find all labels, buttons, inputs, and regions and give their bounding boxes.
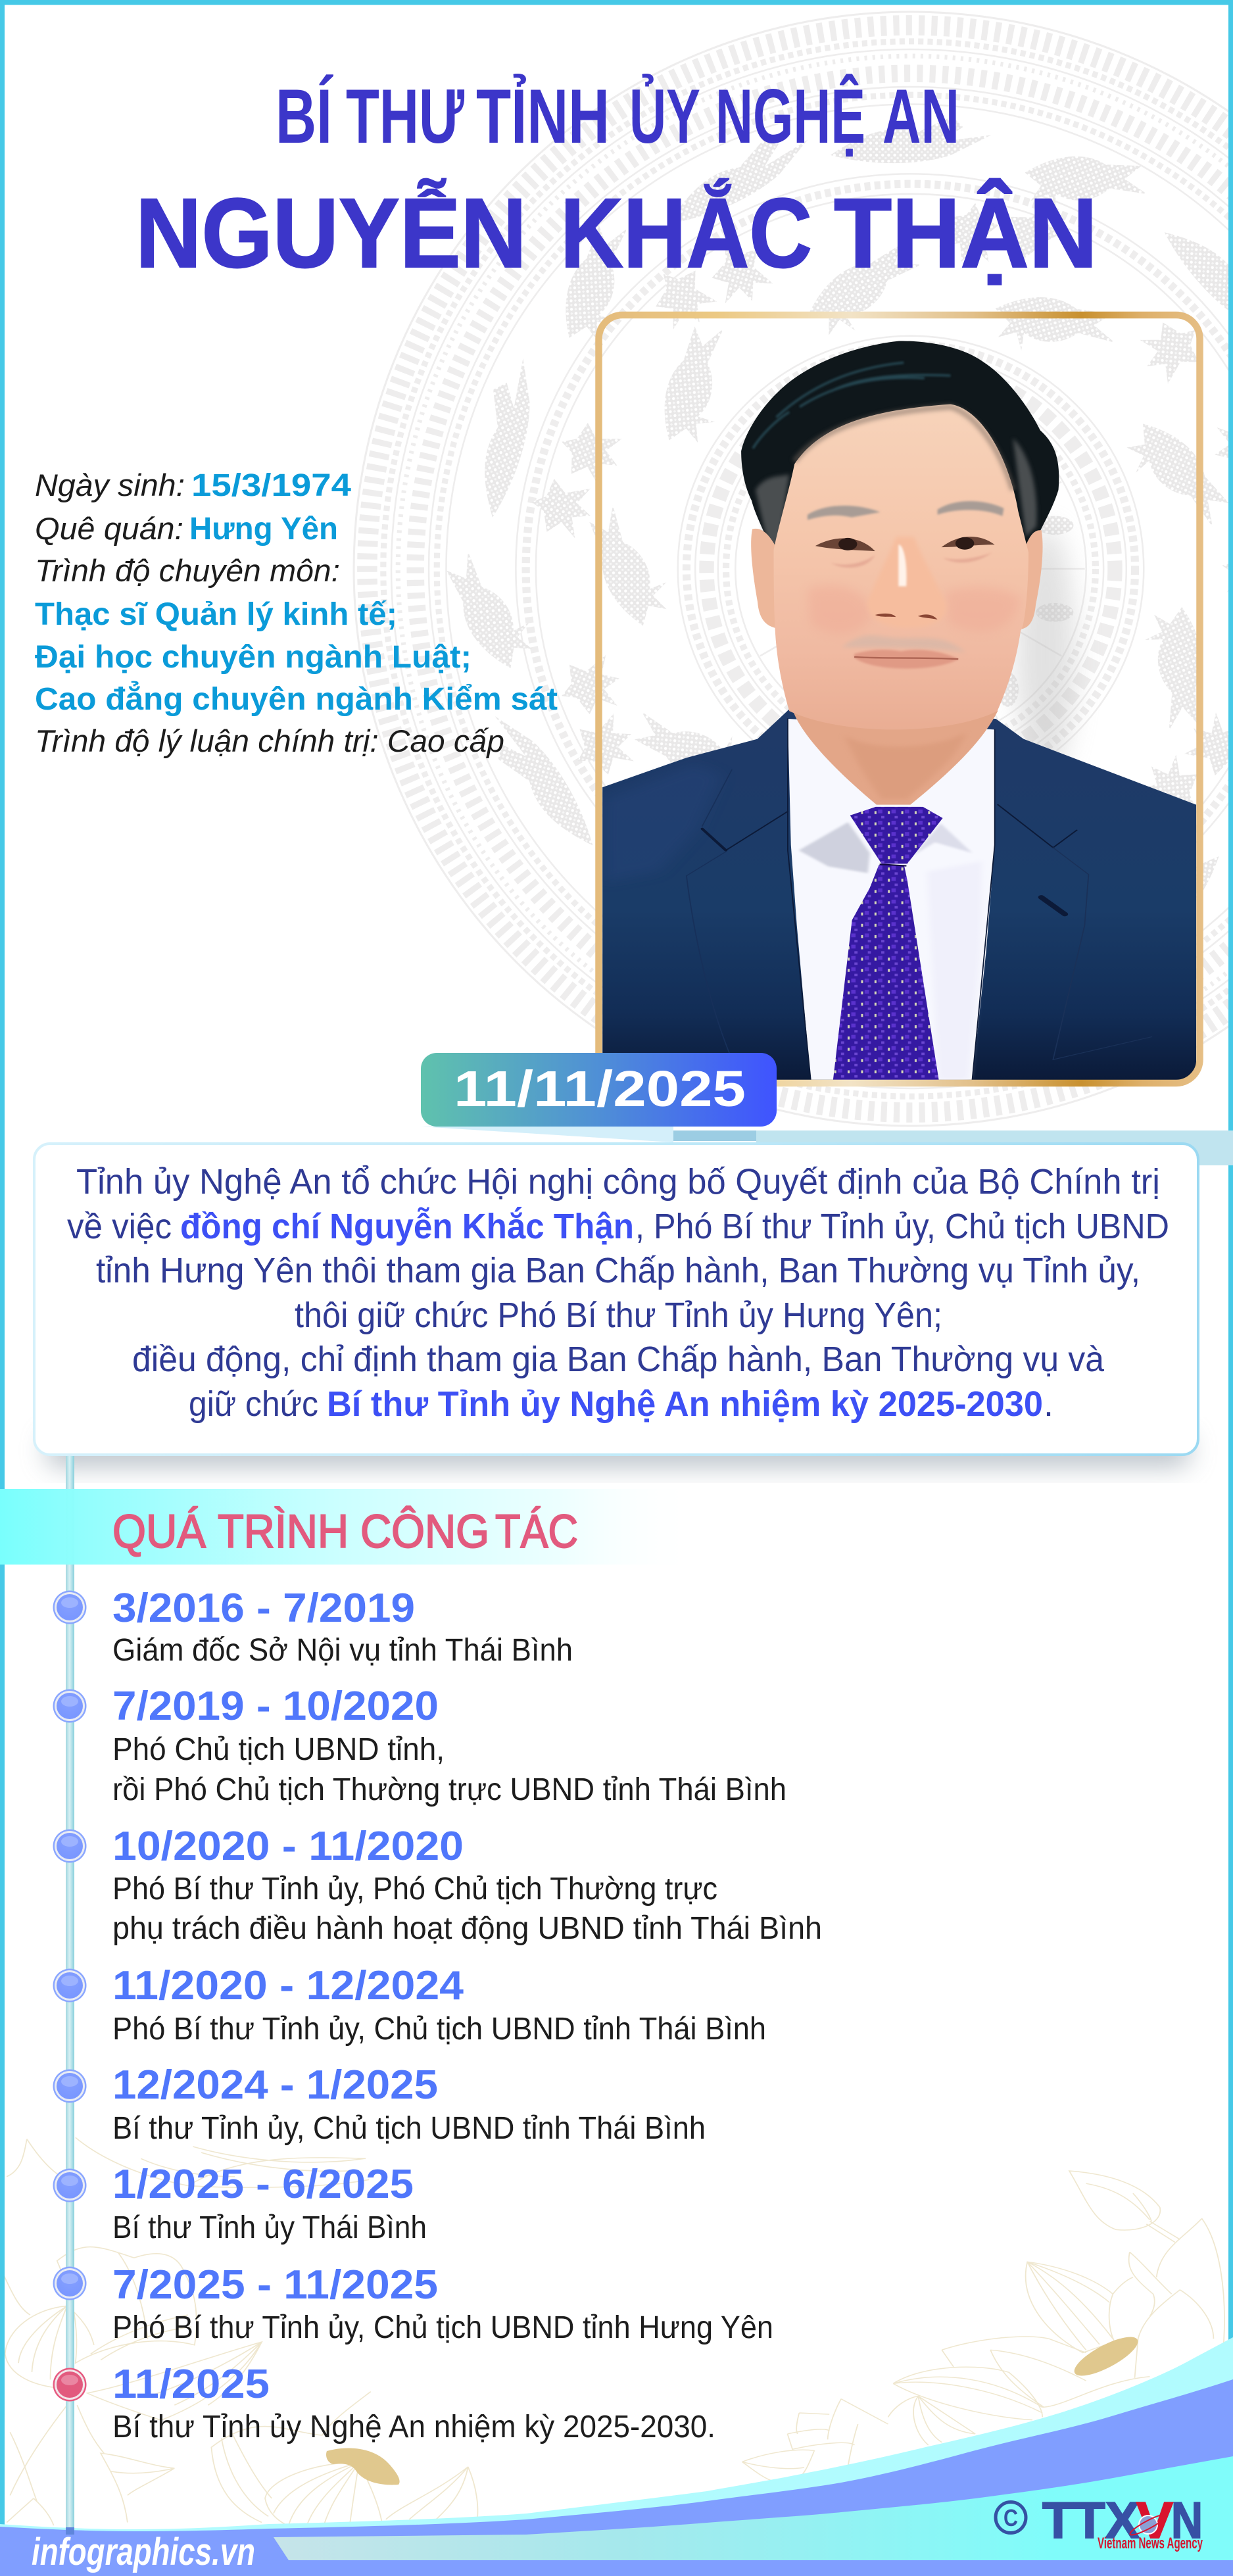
personal information xyxy=(35,468,558,758)
suit, shirt, tie xyxy=(602,710,1196,1081)
birth date: Ngày sinh: xyxy=(35,468,185,502)
announcement line 5: điều động, chỉ định tham gia Ban Chấp hành, Ban Thường vụ và xyxy=(132,1340,1105,1379)
section heading: CÔNG xyxy=(360,1506,489,1558)
title line 1: TỈNH xyxy=(476,73,610,159)
panel: announcement xyxy=(34,1144,1198,1455)
timeline entry 1 xyxy=(53,1586,573,1668)
timeline entry 3 xyxy=(53,1824,822,1946)
timeline entry 6: 1/2025 - 6/2025 xyxy=(112,2162,414,2207)
title line 2: name: NGUYỄN xyxy=(135,178,527,288)
home town xyxy=(35,511,338,547)
announcement line 2: , Phó Bí thư Tỉnh ủy, Chủ tịch UBND xyxy=(635,1207,1169,1246)
announcement line 1: Tỉnh ủy Nghệ An tổ chức Hội nghị công bố Quyết định của Bộ Chính trị xyxy=(76,1162,1160,1202)
section heading xyxy=(112,1506,578,1558)
timeline entry 5 xyxy=(53,2062,706,2146)
timeline entry 5: 12/2024 - 1/2025 xyxy=(112,2062,438,2108)
ears xyxy=(751,529,775,628)
title line 2: name: KHẮC xyxy=(560,178,812,288)
education values xyxy=(35,597,558,717)
lotus gold accent right xyxy=(1069,2330,1143,2383)
education values: Đại học chuyên ngành Luật; xyxy=(35,640,471,675)
footer waves xyxy=(0,2337,1233,2576)
light cyan wave xyxy=(0,2337,1233,2576)
date text: 11/11/2025 xyxy=(454,1061,746,1117)
title line 1: AN xyxy=(882,73,959,159)
portrait drop shadow xyxy=(1016,526,1075,776)
website label: infographics.vn xyxy=(32,2531,255,2573)
home town: Hưng Yên xyxy=(189,512,338,547)
hair xyxy=(741,341,1059,555)
announcement line 6: Bí thư Tỉnh ủy Nghệ An nhiệm kỳ 2025-2030 xyxy=(327,1384,1043,1424)
announcement line 2 xyxy=(67,1207,1169,1246)
political theory level: Trình độ lý luận chính trị: Cao cấp xyxy=(35,723,504,758)
timeline entry 7 xyxy=(53,2262,773,2345)
timeline entry 2: Phó Chủ tịch UBND tỉnh, xyxy=(112,1732,445,1767)
announcement line 3: tỉnh Hưng Yên thôi tham gia Ban Chấp hành, Ban Thường vụ Tỉnh ủy, xyxy=(96,1251,1140,1290)
education label: Trình độ chuyên môn: xyxy=(35,553,340,588)
cyan footer band xyxy=(274,2456,1233,2560)
timeline entry 1: 3/2016 - 7/2019 xyxy=(112,1586,415,1631)
timeline entry 8: current post: Bí thư Tỉnh ủy Nghệ An nhiệm kỳ 2025-2030. xyxy=(112,2410,715,2444)
title line 1 xyxy=(276,73,959,159)
globe xyxy=(1128,2512,1168,2538)
portrait photo xyxy=(602,341,1196,1081)
portrait gold frame xyxy=(598,315,1199,1083)
announcement line 4: thôi giữ chức Phó Bí thư Tỉnh ủy Hưng Yên; xyxy=(295,1296,942,1335)
timeline entry 4 xyxy=(53,1963,766,2047)
education values: Thạc sĩ Quản lý kinh tế; xyxy=(35,597,397,632)
card drop shadow xyxy=(46,1434,1190,1467)
section heading: QUÁ xyxy=(112,1506,206,1558)
timeline entry 2: rồi Phó Chủ tịch Thường trực UBND tỉnh Thái Bình xyxy=(112,1772,786,1807)
timeline entry 4: Phó Bí thư Tỉnh ủy, Chủ tịch UBND tỉnh Thái Bình xyxy=(112,2012,766,2047)
logo: TTXVN xyxy=(1042,2491,1203,2552)
timeline entry 8: current post xyxy=(53,2362,715,2444)
background: lotus left xyxy=(0,2137,477,2531)
title xyxy=(135,73,1098,288)
birth date xyxy=(35,468,351,503)
face xyxy=(774,404,1028,729)
mouth xyxy=(854,650,958,669)
periwinkle wave xyxy=(0,2379,1233,2576)
timeline entry 8: current post: 11/2025 xyxy=(112,2362,270,2407)
ribbon behind date xyxy=(421,1127,1233,1165)
timeline entry 5: Bí thư Tỉnh ủy, Chủ tịch UBND tỉnh Thái Bình xyxy=(112,2111,706,2146)
section heading banner xyxy=(0,1489,697,1565)
copyright symbol xyxy=(996,2502,1026,2533)
title line 1: ỦY xyxy=(629,73,700,159)
announcement line 6: giữ chức xyxy=(189,1384,318,1424)
nose xyxy=(872,537,939,605)
head xyxy=(741,341,1059,729)
date badge xyxy=(421,1053,777,1127)
birth date: 15/3/1974 xyxy=(191,468,351,503)
timeline entry 3: Phó Bí thư Tỉnh ủy, Phó Chủ tịch Thường trực xyxy=(112,1872,717,1907)
title line 2: name: THẬN xyxy=(834,178,1098,288)
timeline entry 7: Phó Bí thư Tỉnh ủy, Chủ tịch UBND tỉnh Hưng Yên xyxy=(112,2310,773,2345)
timeline entry 1: Giám đốc Sở Nội vụ tỉnh Thái Bình xyxy=(112,1633,573,1668)
title line 1: NGHỆ xyxy=(715,73,865,159)
timeline entry 2: 7/2019 - 10/2020 xyxy=(112,1684,439,1729)
timeline line foot xyxy=(66,2527,74,2535)
background: bronze drum pattern xyxy=(354,12,1233,1126)
timeline entry 2 xyxy=(53,1684,786,1807)
announcement line 6: . xyxy=(1044,1384,1053,1424)
copyright symbol: C xyxy=(1003,2504,1018,2531)
logo: TTXVN: V xyxy=(1136,2491,1173,2549)
title line 1: BÍ xyxy=(276,73,334,159)
section heading: TRÌNH xyxy=(218,1506,349,1558)
section heading: TÁC xyxy=(495,1506,578,1558)
background: lotus right xyxy=(742,2171,1224,2481)
title line 1: THƯ xyxy=(346,73,465,159)
announcement line 2: đồng chí Nguyễn Khắc Thận xyxy=(180,1207,634,1246)
timeline entry 7: 7/2025 - 11/2025 xyxy=(112,2262,438,2308)
timeline entry 4: 11/2020 - 12/2024 xyxy=(112,1963,464,2008)
eyebrows xyxy=(808,501,1003,520)
eyes xyxy=(815,537,995,551)
education values: Cao đẳng chuyên ngành Kiểm sát xyxy=(35,681,558,717)
lotus gold accent left xyxy=(326,2448,400,2485)
title line 2: name xyxy=(135,178,1098,288)
announcement line 2: về việc xyxy=(67,1207,172,1246)
logo: TTXVN: TTX xyxy=(1042,2491,1140,2549)
timeline entry 3: phụ trách điều hành hoạt động UBND tỉnh Thái Bình xyxy=(112,1911,822,1946)
timeline entry 6: Bí thư Tỉnh ủy Thái Bình xyxy=(112,2210,427,2245)
logo: TTXVN: N xyxy=(1171,2491,1203,2549)
timeline line xyxy=(66,1456,74,2535)
home town: Quê quán: xyxy=(35,511,183,546)
timeline entry 3: 10/2020 - 11/2020 xyxy=(112,1824,464,1869)
timeline entry 6 xyxy=(53,2162,427,2245)
